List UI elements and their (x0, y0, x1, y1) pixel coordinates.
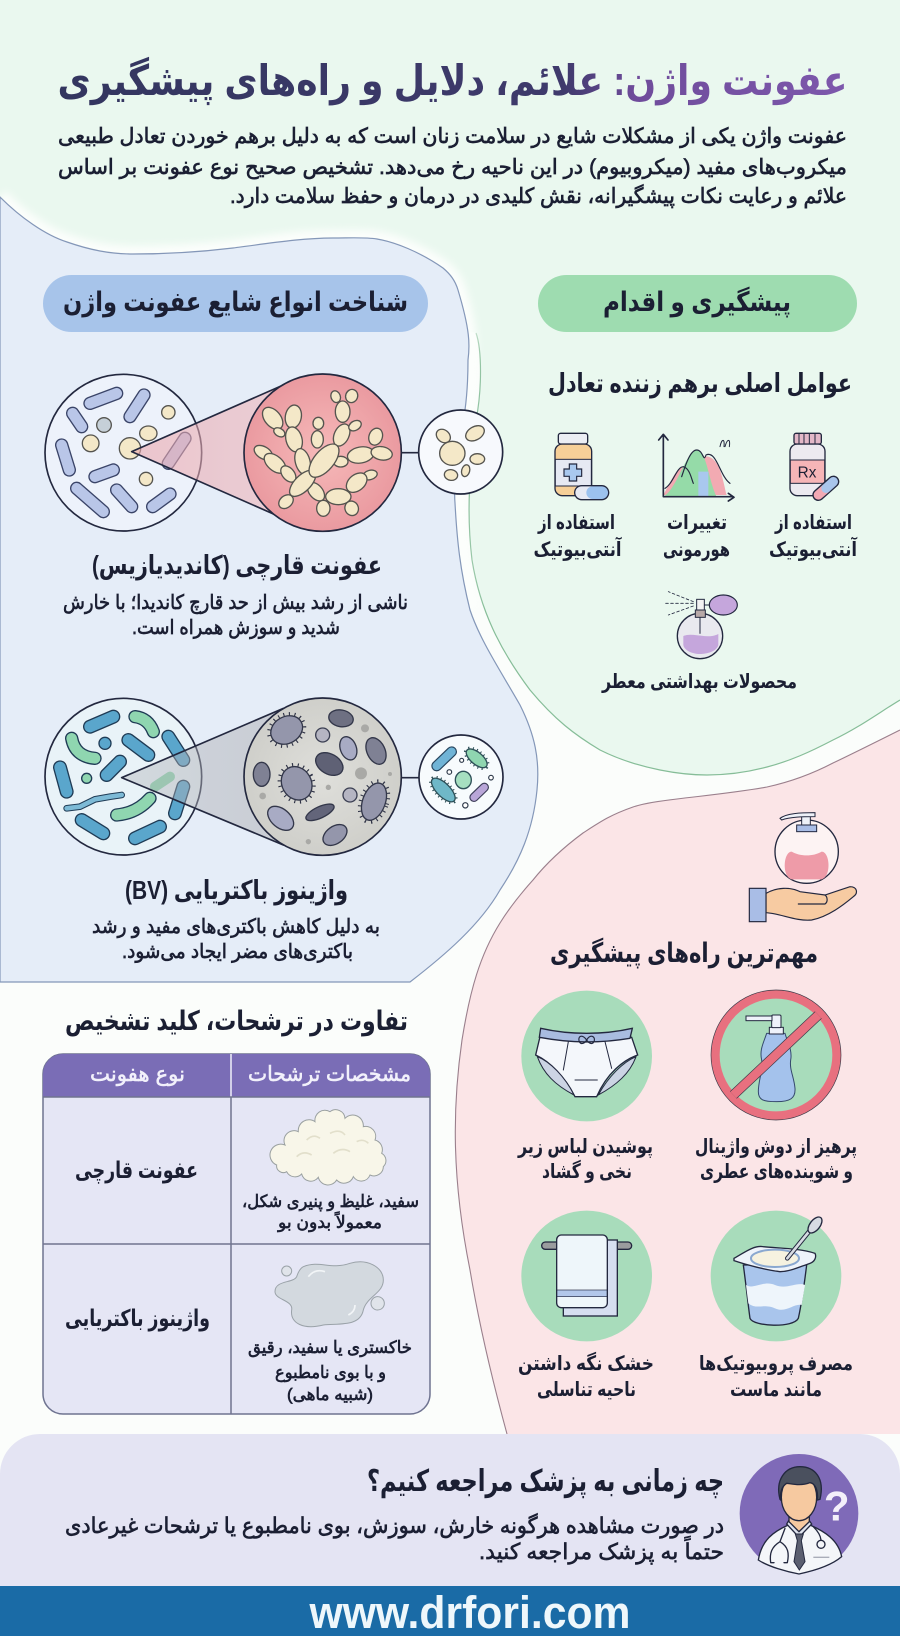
text: doctor advice: حتماً به پزشک مراجعه کنید. (479, 1535, 724, 1565)
label: keep dry (518, 1351, 654, 1401)
text block: bacterial vaginosis: واژینوز باکتریایی (BV) (125, 875, 348, 906)
heading: discharge differences: تفاوت در ترشحات، کلید تشخیص (65, 1006, 408, 1037)
icon: towel (521, 1211, 652, 1341)
icon: doctor with question mark: ? (824, 1483, 849, 1530)
intro text block: عفونت واژن یکی از مشکلات شایع در سلامت زنان است که به دلیل برهم خوردن تعادل طبیعی (58, 125, 847, 149)
label: antibiotic use: آنتی‌بیوتیک (769, 536, 858, 561)
text block: fungal infection: ناشی از رشد بیش از حد قارچ کاندیدا؛ با خارش (63, 592, 408, 615)
panel: when to see a doctor (0, 1434, 900, 1586)
label: wear cotton underwear: پوشیدن لباس زیر (517, 1136, 653, 1159)
text block: bacterial vaginosis: باکتری‌های مضر ایجاد می‌شود. (122, 941, 353, 963)
table: discharge comparison: خاکستری یا سفید، رقیق (248, 1338, 412, 1357)
panel: white glow around blue (0, 197, 470, 610)
heading: most important prevention: مهم‌ترین راه‌های پیشگیری (550, 937, 818, 969)
text: doctor advice (65, 1513, 724, 1565)
icon: thin grey discharge (275, 1262, 384, 1327)
label: antibiotic use (769, 512, 858, 561)
icon: perfume bottle (663, 592, 737, 659)
text: doctor advice: در صورت مشاهده هرگونه خارش، سوزش، بوی نامطبوع یا ترشحات غیرعادی (65, 1513, 724, 1539)
icon: soap pump on hand (749, 813, 856, 922)
panel: blue background (0, 197, 538, 982)
label: probiotics: مصرف پروبیوتیک‌ها (699, 1353, 853, 1376)
intro text block (58, 125, 847, 209)
icon: Rx bottle: Rx (798, 464, 817, 481)
label: avoid douching: و شوینده‌های عطری (700, 1161, 853, 1183)
label: hormonal changes (663, 512, 730, 561)
table: discharge comparison: سفید، غلیظ و پنیری شکل، (242, 1192, 419, 1212)
intro text block: میکروب‌های مفید (میکروبیوم) در این ناحیه رخ می‌دهد. تشخیص صحیح نوع عفونت بر اساس (58, 156, 847, 179)
table: discharge comparison: واژینوز باکتریایی (65, 1305, 210, 1332)
label: keep dry: ناحیه تناسلی (537, 1379, 636, 1401)
label: antibiotic use: استفاده از (537, 512, 615, 534)
text block: fungal infection: عفونت قارچی (کاندیدیازیس) (92, 550, 382, 581)
table: discharge comparison: عفونت قارچی (75, 1157, 198, 1184)
text block: bacterial vaginosis (92, 875, 380, 963)
heading pill: prevention and action (538, 275, 857, 332)
text block: bacterial vaginosis: به دلیل کاهش باکتری‌های مفید و رشد (92, 916, 380, 938)
label: wear cotton underwear: نخی و گشاد (542, 1159, 632, 1183)
table: discharge comparison: معمولاً بدون بو (277, 1211, 382, 1232)
panel: pink outline (455, 730, 900, 1434)
label: avoid douching: پرهیز از دوش واژینال (695, 1136, 857, 1159)
label: wear cotton underwear (517, 1136, 653, 1183)
label: scented hygiene products: محصولات بهداشتی معطر (601, 671, 797, 693)
table: discharge comparison: و با بوی نامطبوع (275, 1363, 386, 1383)
label: antibiotic use (534, 512, 622, 561)
icon: Rx bottle (790, 433, 833, 496)
intro text block: علائم و رعایت نکات پیشگیرانه، نقش کلیدی در درمان و حفظ سلامت دارد. (230, 184, 847, 209)
label: probiotics (699, 1353, 853, 1401)
icon: thick white discharge (270, 1110, 386, 1185)
label: antibiotic use: آنتی‌بیوتیک (534, 536, 622, 561)
icon: medicine bottle with cross (555, 433, 602, 496)
heading: when to see a doctor: چه زمانی به پزشک مراجعه کنیم؟ (367, 1465, 724, 1499)
label: keep dry: خشک نگه داشتن (518, 1351, 654, 1375)
panel: pink background (455, 730, 900, 1434)
text block: fungal infection (63, 550, 408, 639)
label: hormonal changes: تغییرات (667, 512, 727, 534)
panel: green outline (469, 333, 900, 775)
label: avoid douching (695, 1136, 857, 1183)
heading pill: types of infection: شناخت انواع شایع عفونت واژن (63, 287, 408, 318)
label: antibiotic use: استفاده از (774, 512, 852, 534)
illustration: fungal infection microscope view (45, 374, 503, 531)
label: probiotics: مانند ماست (730, 1379, 822, 1401)
heading pill: types of infection (43, 275, 428, 332)
text block: fungal infection: شدید و سوزش همراه است. (132, 617, 340, 639)
icon: no douching (711, 990, 841, 1120)
table: discharge comparison: نوع هفونت (90, 1063, 185, 1086)
icon: cotton underwear (521, 991, 652, 1121)
table: discharge comparison: (شبیه ماهی) (287, 1385, 373, 1404)
icon: doctor with question mark (740, 1454, 858, 1574)
label: hormonal changes: هورمونی (663, 539, 730, 561)
table: discharge comparison: مشخصات ترشحات (248, 1063, 411, 1086)
panel: green background (0, 0, 900, 775)
footer bar (0, 1586, 900, 1636)
heading pill: prevention and action: پیشگیری و اقدام (603, 286, 791, 318)
icon: yogurt (711, 1211, 841, 1341)
icon: hormone chart (659, 434, 734, 501)
table: discharge comparison (43, 1054, 430, 1414)
illustration: bacterial vaginosis microscope view (45, 698, 503, 855)
